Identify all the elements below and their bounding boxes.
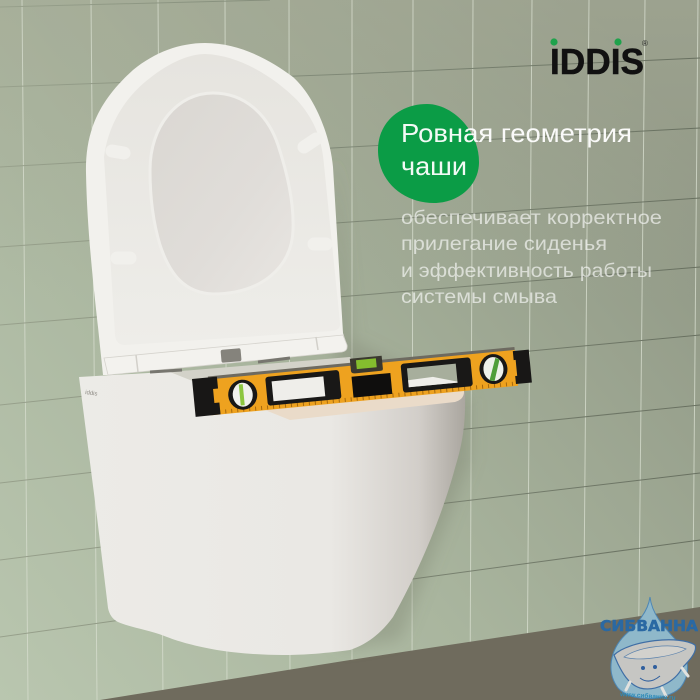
bathtub xyxy=(614,640,696,696)
right vial xyxy=(478,353,509,385)
seat opening xyxy=(150,93,293,294)
description text: прилегание сиденья xyxy=(401,233,607,255)
shadow on wall xyxy=(335,150,470,650)
left end cap xyxy=(192,377,221,417)
tub feet xyxy=(626,668,688,696)
left vial xyxy=(227,378,259,411)
spirit level xyxy=(192,342,532,417)
green accent blob xyxy=(378,104,479,203)
brand mark on bowl: iddis xyxy=(85,390,98,398)
seat hinge strip xyxy=(104,335,347,375)
left window xyxy=(265,370,342,406)
description text: и эффективность работы xyxy=(401,260,652,282)
hinge seams xyxy=(136,337,318,372)
right window xyxy=(401,357,473,393)
level top edge xyxy=(208,347,515,380)
brand logo: iddis: IDDIS xyxy=(550,41,644,82)
watermark wordmark: СИБВАННА xyxy=(600,617,698,635)
description text: системы смыва xyxy=(401,286,557,308)
tub face xyxy=(641,666,645,670)
drop xyxy=(611,597,687,698)
toilet seat xyxy=(86,43,347,375)
floor xyxy=(100,607,700,700)
heading: чаши xyxy=(401,151,467,181)
seat inner recess xyxy=(104,54,340,345)
seat bumpers xyxy=(112,139,326,258)
center label block xyxy=(352,373,392,398)
description text: обеспечивает корректное xyxy=(401,207,662,229)
top vial xyxy=(350,356,383,374)
level body xyxy=(208,350,518,415)
right end cap xyxy=(513,350,532,384)
ruler ticks xyxy=(213,383,516,413)
rim reflection xyxy=(265,387,464,420)
watermark: Sibvanna xyxy=(600,597,698,700)
heading: Ровная геометрия xyxy=(401,118,632,148)
hinge bracket xyxy=(221,348,242,363)
toilet bowl xyxy=(79,357,465,655)
brand logo: iddis: ® xyxy=(642,39,648,48)
hinge mounts xyxy=(150,358,290,372)
bowl rim xyxy=(170,357,362,384)
